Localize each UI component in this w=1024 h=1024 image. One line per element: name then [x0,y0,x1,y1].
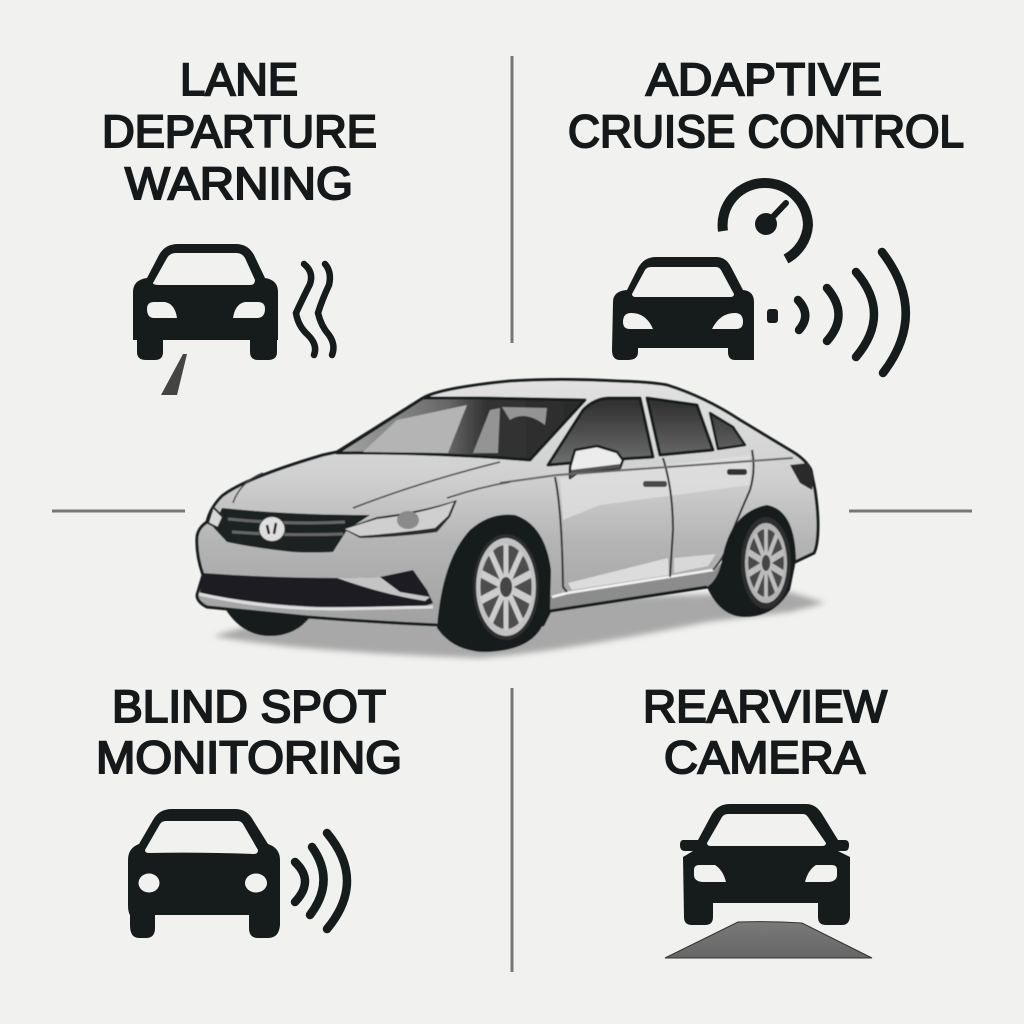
rear side window [647,398,713,455]
icon: lane departure car [133,244,333,395]
heading: adaptive cruise control [568,54,964,157]
grille [213,508,370,552]
door highlight [568,558,669,590]
heading: lane departure warning: WARNING [125,158,353,209]
sill [550,560,723,611]
central car illustration [197,380,825,658]
heading: adaptive cruise control: CRUISE CONTROL [568,106,964,157]
headlight [343,500,457,538]
door handles [643,481,667,487]
icon: speedometer [723,183,808,259]
badge [259,516,285,542]
heading: adaptive cruise control: ADAPTIVE [646,54,882,105]
heading: rearview camera [643,681,888,783]
ground shadow [213,592,825,658]
far front tire [226,610,311,636]
lower intake [200,570,433,607]
tail light [790,463,814,490]
heading: blind spot monitoring [96,681,402,783]
windshield [337,398,585,460]
heading: lane departure warning: DEPARTURE [102,106,377,157]
front wheel [437,515,551,652]
side light [208,507,223,528]
front side window [548,398,653,465]
side mirror [570,446,623,478]
heading: lane departure warning [102,54,377,209]
windshield reflection [363,405,467,453]
heading: blind spot monitoring: BLIND SPOT [112,681,386,732]
heading: rearview camera: CAMERA [664,732,865,783]
chrome strip [337,577,430,601]
heading: blind spot monitoring: MONITORING [96,732,402,783]
heading: rearview camera: REARVIEW [643,681,888,732]
hood creases [233,462,510,508]
car body [197,380,818,625]
seats [473,407,547,453]
icon: rearview car [665,804,872,958]
quarter window [710,413,745,449]
heading: lane departure warning: LANE [180,54,298,105]
door lines [500,450,793,592]
rear wheel [707,505,796,617]
icon: adaptive cruise car [612,252,906,373]
icon: blind spot car [128,809,347,938]
